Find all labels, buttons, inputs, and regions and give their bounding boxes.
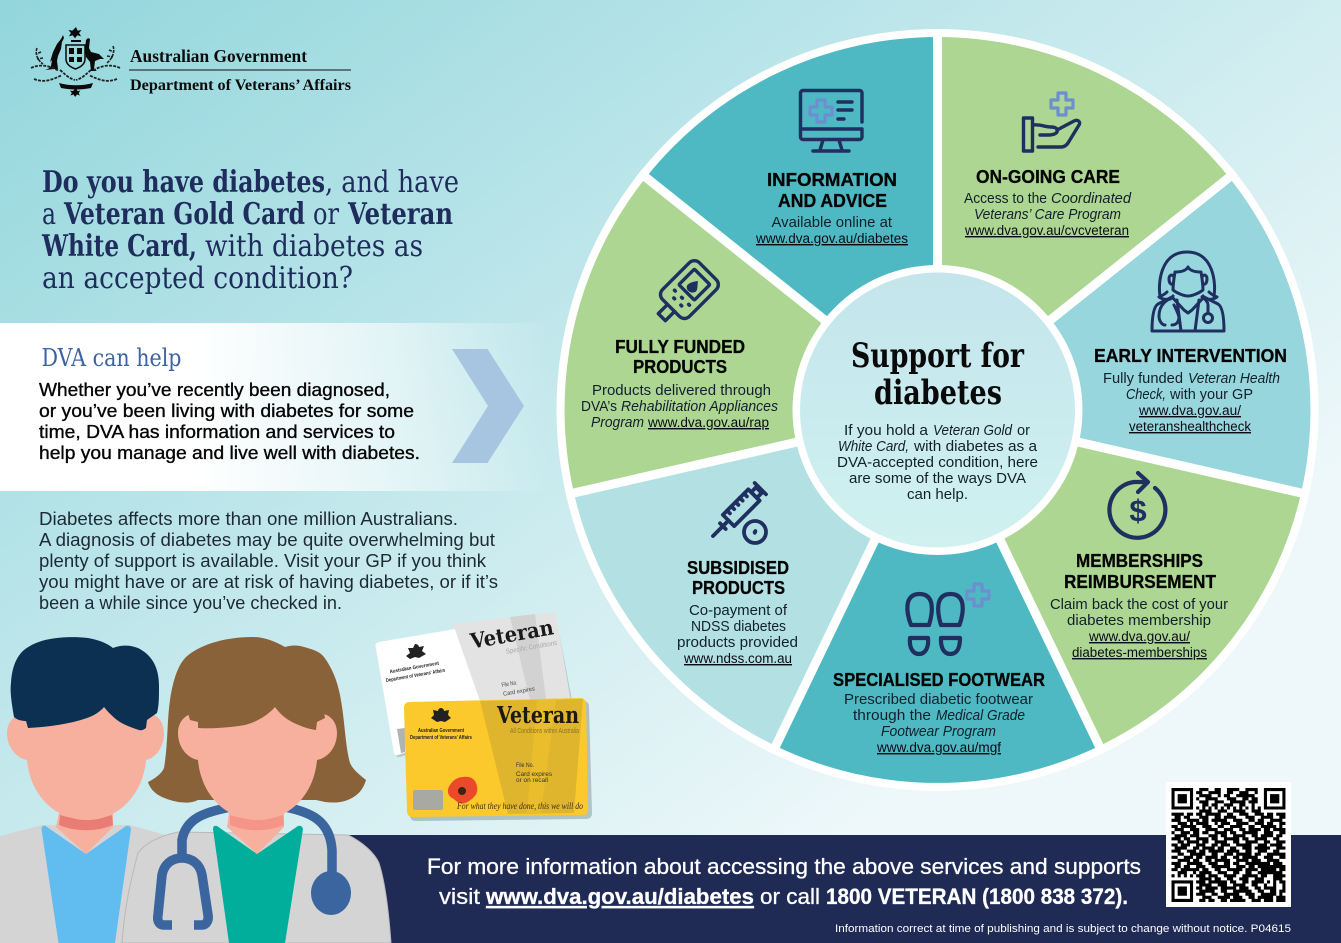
centre text: can help. xyxy=(907,487,968,503)
content: fully funded products: PRODUCTS xyxy=(633,356,727,377)
logo wordmark xyxy=(129,46,351,94)
white veteran card: Department of Veterans’ Affairs xyxy=(386,668,446,684)
main question heading: Do you have diabetes xyxy=(42,165,325,200)
white veteran card xyxy=(375,612,572,757)
face xyxy=(198,700,317,820)
content: memberships reimbursement: diabetes membership xyxy=(1067,613,1211,629)
icon: computer monitor with cross xyxy=(800,90,862,151)
text block: diabetes statistics: been a while since you’ve checked in. xyxy=(39,593,342,613)
main question heading: or xyxy=(313,197,340,232)
gold veteran card: Australian Government xyxy=(418,728,464,734)
segment: information and advice xyxy=(646,37,938,410)
content: early intervention: Check, xyxy=(1126,387,1166,403)
text block: DVA can help: or you’ve been living with diabetes for some xyxy=(39,401,414,421)
face xyxy=(27,700,146,820)
content: specialised footwear: Medical Grade xyxy=(936,708,1025,724)
content: specialised footwear: Prescribed diabetic footwear xyxy=(844,692,1033,708)
content: specialised footwear: Footwear Program xyxy=(881,724,996,740)
icon: syringe and vial xyxy=(707,483,766,543)
content: specialised footwear: SPECIALISED FOOTWEAR xyxy=(833,669,1045,690)
coat xyxy=(122,832,391,943)
illustration: male doctor xyxy=(0,637,200,943)
segment: fully funded products xyxy=(565,177,938,493)
footer band xyxy=(340,835,1341,943)
content: early intervention: www.dva.gov.au/ xyxy=(1138,403,1241,419)
gold veteran card: All Conditions within Australia xyxy=(510,728,579,735)
content: subsidised products: www.ndss.com.au xyxy=(683,651,792,667)
icon: hand with cross xyxy=(1024,93,1080,151)
gold veteran card: File No. xyxy=(516,763,534,769)
content: specialised footwear: through the xyxy=(853,708,931,724)
white veteran card: Specific Conditions xyxy=(505,640,558,656)
ears xyxy=(7,713,164,760)
content: subsidised products xyxy=(677,483,798,667)
neck xyxy=(56,813,113,854)
centre text: If you hold a xyxy=(844,423,929,439)
main question heading: an accepted condition? xyxy=(42,261,353,296)
white veteran card: Australian Government xyxy=(389,661,440,675)
content: fully funded products: Products delivered through xyxy=(592,383,771,399)
shirt xyxy=(42,826,131,943)
centre text: are some of the ways DVA xyxy=(849,471,1026,487)
illustration: veteran cards xyxy=(375,612,592,821)
gold veteran card: Department of Veterans’ Affairs xyxy=(410,735,472,741)
main question heading: with diabetes as xyxy=(205,229,423,264)
content: on-going care: ON-GOING CARE xyxy=(976,166,1120,187)
icon: dollar with circular arrow xyxy=(1109,473,1165,538)
content: fully funded products: DVA’s xyxy=(581,399,617,415)
main question heading: White Card, xyxy=(41,229,197,264)
fringe xyxy=(188,660,325,730)
neck shadow xyxy=(230,815,284,830)
content: subsidised products: PRODUCTS xyxy=(692,577,785,598)
centre text: or xyxy=(1017,423,1030,439)
white veteran card: Card expires xyxy=(503,686,535,698)
footnote: Information correct at time of publishing and is subject to change without notice. P04615 xyxy=(835,923,1291,935)
gold veteran card: or on recall xyxy=(516,778,548,784)
main question heading: Veteran Gold Card xyxy=(63,197,305,232)
hair back xyxy=(148,637,366,803)
main question heading: , and have xyxy=(325,165,459,200)
illustration: female doctor xyxy=(122,637,391,943)
content: fully funded products: FULLY FUNDED xyxy=(615,336,745,357)
wheel spokes xyxy=(566,30,1309,753)
main question heading xyxy=(41,165,459,296)
centre text: Veteran Gold xyxy=(933,423,1013,439)
content: information and advice xyxy=(755,90,908,247)
text block: DVA can help: Whether you’ve recently been diagnosed, xyxy=(39,380,390,400)
content: fully funded products: Program xyxy=(591,415,644,431)
footer call to action: For more information about accessing the above services and supports xyxy=(427,854,1141,879)
centre text: DVA-accepted condition, here xyxy=(837,455,1038,471)
content: subsidised products: products provided xyxy=(677,635,798,651)
content: on-going care xyxy=(964,93,1132,239)
segment: early intervention xyxy=(938,177,1310,493)
icon: poppy xyxy=(448,777,477,804)
gold veteran card: Veteran xyxy=(496,702,579,729)
hair xyxy=(11,637,159,730)
content: on-going care: www.dva.gov.au/cvcveteran xyxy=(964,223,1129,239)
heading: DVA can help: DVA can help xyxy=(42,344,182,372)
logo wordmark: Australian Government xyxy=(130,46,307,66)
shirt xyxy=(213,826,303,943)
segment: memberships reimbursement xyxy=(938,410,1301,746)
segment: subsidised products xyxy=(574,410,938,746)
content: specialised footwear xyxy=(833,584,1045,756)
wheel outer ring xyxy=(556,29,1318,791)
white veteran card: File No. xyxy=(501,680,518,689)
icon: dollar with circular arrow: $ xyxy=(1129,493,1147,528)
neck shadow xyxy=(59,815,113,830)
text block: DVA can help: time, DVA has information and services to xyxy=(39,422,395,442)
stethoscope xyxy=(158,807,351,925)
content: on-going care: Access to the xyxy=(964,191,1047,207)
content: information and advice: INFORMATION xyxy=(767,169,897,190)
footer call to action: 1800 VETERAN (1800 838 372). xyxy=(826,884,1128,909)
content: subsidised products: SUBSIDISED xyxy=(687,557,789,578)
content: on-going care: Veterans’ Care Program xyxy=(974,207,1121,223)
icon: glucose meter xyxy=(648,258,721,331)
content: subsidised products: Co-payment of xyxy=(689,603,788,619)
content: information and advice: Available online at xyxy=(772,215,892,231)
content: fully funded products: www.dva.gov.au/rap xyxy=(647,415,769,431)
content: early intervention: Fully funded xyxy=(1103,371,1183,387)
text block: diabetes statistics xyxy=(39,509,498,613)
coat xyxy=(0,825,200,943)
content: memberships reimbursement: MEMBERSHIPS xyxy=(1076,550,1203,571)
arrow: chevron xyxy=(452,349,524,463)
centre heading xyxy=(851,336,1025,413)
content: information and advice: www.dva.gov.au/diabetes xyxy=(755,231,908,247)
content: fully funded products xyxy=(581,258,778,431)
content: subsidised products: NDSS diabetes xyxy=(691,619,786,635)
gold veteran card: Card expires xyxy=(516,772,552,778)
logo wordmark: Department of Veterans’ Affairs xyxy=(130,77,351,94)
centre heading: diabetes xyxy=(874,373,1002,413)
footer call to action xyxy=(427,854,1141,909)
content: specialised footwear: www.dva.gov.au/mgf xyxy=(876,740,1001,756)
content: information and advice: AND ADVICE xyxy=(778,190,887,211)
centre text: White Card, xyxy=(838,439,909,455)
centre text: with diabetes as a xyxy=(913,439,1038,455)
icon: female doctor xyxy=(1152,252,1224,331)
centre heading: Support for xyxy=(851,336,1025,376)
content: memberships reimbursement xyxy=(1050,473,1228,661)
chart: support wheel xyxy=(556,29,1318,791)
gold veteran card xyxy=(404,698,592,821)
content: memberships reimbursement: diabetes-memberships xyxy=(1072,645,1207,661)
centre circle xyxy=(792,265,1082,555)
icon: shoe prints with cross xyxy=(907,584,989,654)
centre text xyxy=(837,423,1038,503)
content: early intervention: Veteran Health xyxy=(1188,371,1280,387)
text block: diabetes statistics: plenty of support is available. Visit your GP if you think xyxy=(39,551,487,571)
segment: on-going care xyxy=(938,37,1229,410)
text block: diabetes statistics: Diabetes affects more than one million Australians. xyxy=(39,509,458,529)
text block: DVA can help: help you manage and live well with diabetes. xyxy=(39,443,420,463)
content: memberships reimbursement: www.dva.gov.au/ xyxy=(1088,629,1190,645)
text block: diabetes statistics: you might have or are at risk of having diabetes, or if it’s xyxy=(39,572,498,592)
footer call to action: visit xyxy=(439,884,481,909)
content: early intervention: veteranshealthcheck xyxy=(1129,419,1252,435)
segment: specialised footwear xyxy=(776,410,1099,783)
logo: Australian Government xyxy=(31,27,351,97)
content: memberships reimbursement: REIMBURSEMENT xyxy=(1064,571,1217,592)
text block: diabetes statistics: A diagnosis of diabetes may be quite overwhelming but xyxy=(39,530,495,550)
main question heading: a xyxy=(42,197,56,232)
content: fully funded products: Rehabilitation Appliances xyxy=(621,399,778,415)
footer call to action: or call xyxy=(760,884,820,909)
gold veteran card: For what they have done, this we will do xyxy=(456,802,583,812)
neck xyxy=(227,813,284,854)
content: memberships reimbursement: Claim back the cost of your xyxy=(1050,597,1228,613)
content: on-going care: Coordinated xyxy=(1051,191,1132,207)
ears xyxy=(178,713,337,760)
white veteran card: Veteran xyxy=(467,614,555,654)
content: early intervention xyxy=(1094,252,1287,435)
content: early intervention: with your GP xyxy=(1169,387,1253,403)
content: early intervention: EARLY INTERVENTION xyxy=(1094,345,1287,366)
QR code xyxy=(1166,782,1291,907)
main question heading: Veteran xyxy=(347,197,453,232)
footer call to action: www.dva.gov.au/diabetes xyxy=(485,884,754,909)
panel: DVA can help xyxy=(0,323,550,491)
icon: coat of arms xyxy=(31,27,120,97)
text block: DVA can help xyxy=(39,380,420,463)
